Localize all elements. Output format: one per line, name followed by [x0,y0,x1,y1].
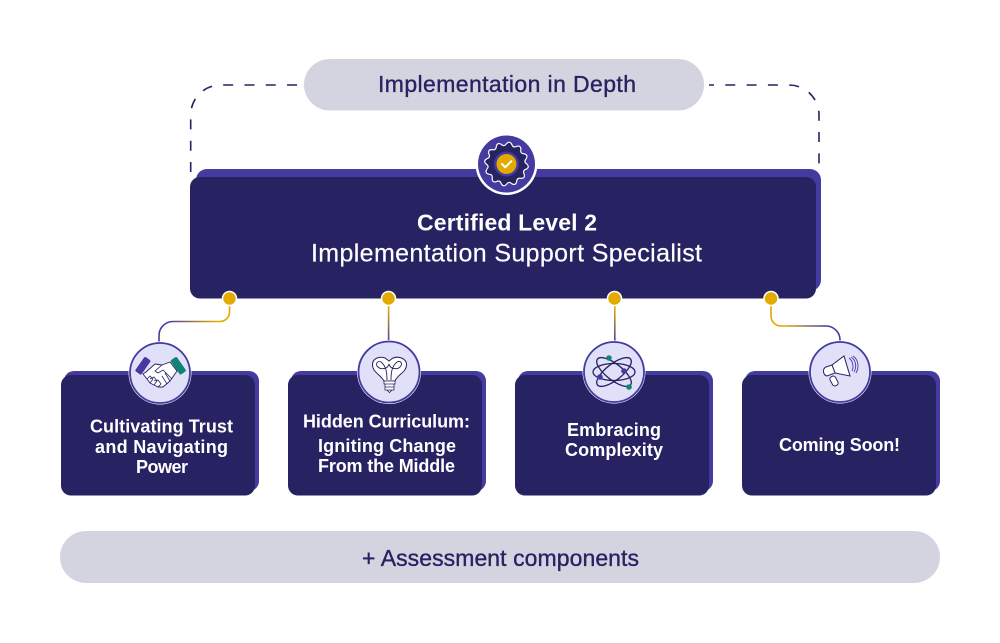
card 1: Cultivating Trust: Power [136,457,188,477]
dashed bracket: right [709,85,819,165]
bottom pill: Assessment components: + Assessment components [362,545,639,571]
card 2: Hidden Curriculum [288,371,486,496]
connector 3 [614,306,616,342]
icon: heart light bulb [357,340,421,404]
card 4: Coming Soon [742,371,940,496]
icon: certified badge [476,133,538,195]
main panel subheading: Implementation Support Specialist [311,240,702,268]
icon: megaphone [808,340,872,404]
dashed bracket: left [191,85,300,172]
bottom pill: Assessment components [60,531,940,583]
card 3: Embracing Complexity: Complexity [565,440,663,460]
connector 1 [159,305,230,344]
card 2: Hidden Curriculum: From the Middle [318,456,455,476]
main panel heading: Certified Level 2 [417,210,597,236]
card 1: Cultivating Trust: Cultivating Trust [90,416,233,436]
card 2: Hidden Curriculum: Hidden Curriculum: [303,412,470,432]
icon: atom [582,340,646,404]
connector 2 [388,306,389,342]
card 1: Cultivating Trust [61,371,259,496]
top pill: Implementation in Depth [304,59,704,110]
card 1: Cultivating Trust: and Navigating [95,437,228,457]
icon: handshake [128,342,192,404]
card 3: Embracing Complexity: Embracing [567,420,661,440]
connector dots [222,292,778,306]
top pill: Implementation in Depth: Implementation in Depth [378,71,636,97]
card 2: Hidden Curriculum: Igniting Change [318,436,456,456]
main panel: certified level 2 [190,169,821,298]
card 4: Coming Soon: Coming Soon! [779,435,900,455]
connector 4 [771,305,840,344]
card 3: Embracing Complexity [515,371,713,496]
